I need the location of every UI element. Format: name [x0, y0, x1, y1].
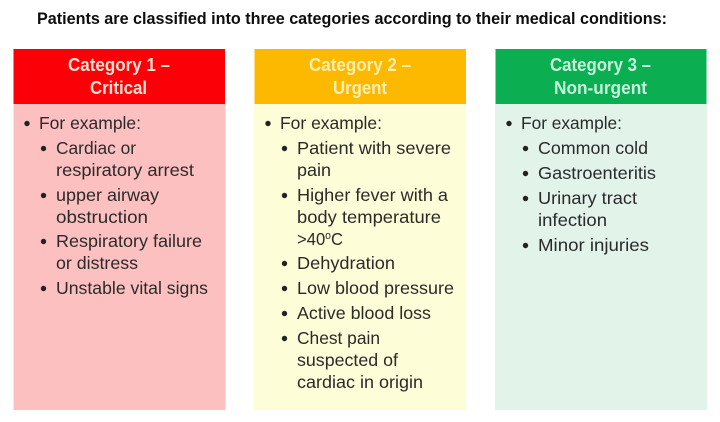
- panel body: category 1: [14, 104, 226, 410]
- list: category 2 examples: [265, 113, 454, 392]
- list: category 2 examples: Active blood loss: [297, 303, 431, 323]
- title: Patients are classified into three categories according to their medical conditions:: [37, 9, 667, 28]
- panel body: category 3: [495, 104, 707, 410]
- list: category 1 examples: For example:: [39, 113, 141, 133]
- list: category 1 examples: obstruction: [56, 207, 148, 227]
- panel: category 1 critical: [14, 49, 226, 410]
- list: category 1 examples: Respiratory failure: [56, 231, 202, 251]
- list: category 2 examples: C: [331, 229, 343, 249]
- list: category 3 examples: [506, 113, 656, 255]
- list: category 2 examples: For example:: [280, 113, 382, 133]
- list: category 3 examples: Minor injuries: [538, 235, 649, 255]
- header: category 2: Urgent: [333, 78, 387, 98]
- list: category 2 examples: suspected of: [297, 350, 398, 370]
- panel: category 3 non-urgent: [495, 49, 707, 410]
- list: category 2 examples: Patient with severe: [297, 138, 451, 158]
- header: category 3: Category 3 –: [550, 55, 651, 75]
- panel: category 2 urgent: [254, 49, 466, 410]
- list: category 2 examples: pain: [297, 160, 331, 180]
- list: category 1 examples: Unstable vital signs: [56, 278, 208, 298]
- list: category 2 examples: Higher fever with a: [297, 185, 448, 205]
- list: category 3 examples: Common cold: [538, 138, 648, 158]
- list: category 3 examples: For example:: [521, 113, 622, 133]
- header: category 2: [254, 49, 466, 104]
- list: category 2 examples: body temperature: [297, 207, 441, 227]
- list: category 3 examples: Gastroenteritis: [538, 163, 656, 183]
- list: category 3 examples: infection: [538, 210, 607, 230]
- list: category 3 examples: Urinary tract: [538, 188, 637, 208]
- header: category 2: Category 2 –: [309, 55, 411, 75]
- list: category 1 examples: upper airway: [56, 185, 159, 205]
- list: category 1 examples: or distress: [56, 253, 138, 273]
- list: category 1 examples: Cardiac or: [56, 138, 136, 158]
- list: category 1 examples: [24, 113, 208, 298]
- list: category 2 examples: Dehydration: [297, 253, 395, 273]
- list: category 2 examples: >40: [297, 229, 327, 249]
- header: category 3: [496, 49, 706, 104]
- header: category 1: Category 1 –: [68, 55, 170, 75]
- header: category 1: Critical: [90, 78, 147, 98]
- list: category 2 examples: Chest pain: [297, 328, 380, 348]
- header: category 1: [14, 49, 225, 104]
- header: category 3: Non-urgent: [554, 78, 647, 98]
- list: category 2 examples: o: [325, 230, 331, 242]
- panel body: category 2: [254, 104, 466, 410]
- list: category 2 examples: Low blood pressure: [297, 278, 454, 298]
- list: category 1 examples: respiratory arrest: [56, 160, 194, 180]
- list: category 2 examples: cardiac in origin: [297, 372, 423, 392]
